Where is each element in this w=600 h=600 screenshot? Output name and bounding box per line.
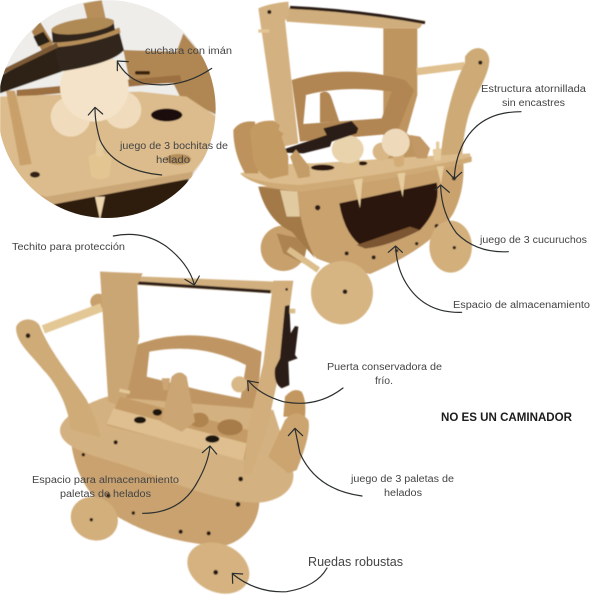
body screws (315, 176, 456, 259)
text: espacio para almacenamiento paletas de helados (32, 475, 179, 500)
arrow: to popsicles (288, 428, 362, 496)
text: juego de 3 paletas de helados: helados (384, 488, 422, 499)
cones (353, 142, 444, 208)
peg (119, 389, 130, 394)
door arch (292, 72, 414, 142)
arrow: to spoon (117, 61, 212, 85)
arrow: to cones (435, 185, 508, 252)
text: cuchara con imán: cuchara con imán (145, 46, 232, 57)
arrow: to door (248, 381, 343, 403)
left post (100, 272, 143, 407)
storage opening (339, 183, 438, 248)
text: estructura atornillada (481, 84, 586, 109)
back wheel (261, 226, 308, 271)
screws (82, 440, 243, 535)
text: techito para protección: Techito para protección (12, 242, 125, 253)
front wheel (311, 261, 373, 324)
right post (383, 28, 426, 160)
arrow: to wheel (232, 568, 327, 592)
spoon tongs (282, 121, 358, 153)
text: juego de 3 bochitas de helado (119, 141, 228, 166)
text: juego de 3 paletas de helados (350, 474, 454, 499)
text: ruedas robustas: Ruedas robustas (308, 555, 403, 569)
standing popsicle (161, 372, 195, 432)
illustration: bottom wooden cart (16, 272, 309, 600)
right wheel (429, 221, 472, 273)
roof bar (104, 275, 277, 293)
text: estructura atornillada: Estructura atornillada (481, 84, 586, 95)
tray (107, 397, 248, 461)
text: espacio para almacenamiento paletas de helados: paletas de helados (60, 489, 151, 500)
text: juego de 3 paletas de helados: juego de 3 paletas de (350, 474, 454, 485)
arrow: to roof (113, 234, 199, 285)
text: espacio para almacenamiento paletas de helados: Espacio para almacenamiento (32, 475, 179, 486)
handle bar (43, 307, 102, 329)
platform (60, 397, 293, 503)
text: puerta conservadora de frío: Puerta conservadora de (327, 362, 442, 373)
text: no es un caminador: NO ES UN CAMINADOR (441, 410, 572, 424)
handle (16, 319, 101, 437)
text: juego de 3 bochitas de helado: juego de 3 bochitas de (119, 141, 228, 152)
front wheel (179, 533, 258, 600)
arrow: to scoops (88, 107, 162, 175)
hanging spoon (275, 305, 298, 388)
popsicles (233, 121, 258, 173)
back scoop (231, 376, 247, 392)
text: juego de 3 cucuruchos: juego de 3 cucuruchos (479, 235, 587, 246)
door arch (113, 335, 262, 430)
handle bar (417, 66, 465, 72)
left post (258, 2, 298, 147)
arrow: to tray hole (143, 446, 217, 513)
small cone (162, 378, 170, 390)
text: puerta conservadora de frío: frío. (375, 376, 393, 387)
scoops (332, 129, 410, 163)
back popsicle (283, 390, 305, 417)
axle (288, 249, 318, 270)
handle (440, 48, 489, 163)
text: estructura atornillada: sin encastres (502, 98, 565, 109)
text: espacio de almacenamiento: Espacio de almacenamiento (453, 300, 590, 311)
door inner cone (320, 92, 339, 123)
rear bump (90, 294, 106, 310)
support piece (290, 149, 310, 178)
platform (240, 153, 472, 192)
front popsicle (268, 413, 309, 473)
body (72, 447, 259, 546)
roof (285, 7, 425, 28)
body (258, 163, 464, 274)
text: puerta conservadora de frío (327, 362, 442, 387)
front post (243, 281, 293, 475)
left wheel (64, 489, 125, 548)
text: juego de 3 bochitas de helado: helado (156, 155, 190, 166)
arrow: to structure screw (447, 112, 521, 179)
illustration: top wooden cart (233, 2, 489, 324)
arrow: to storage (388, 246, 462, 312)
panel: circular detail photo of spoon and ice cream scoops (0, 0, 232, 220)
